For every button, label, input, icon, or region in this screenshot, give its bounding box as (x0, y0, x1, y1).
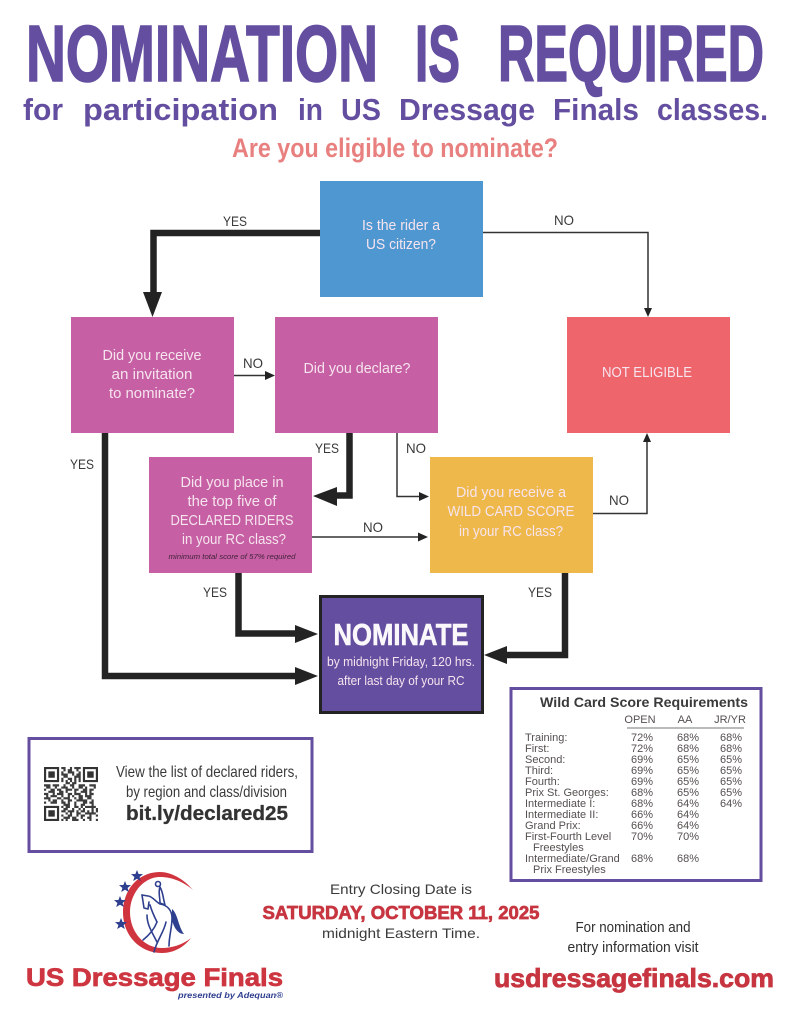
entry closing date: Entry Closing Date is (330, 881, 472, 897)
link text: bit.ly/declared25 (126, 803, 288, 825)
link text (116, 764, 298, 825)
table rows: First-Fourth Level (525, 831, 611, 843)
box: US citizen: Is the rider a (362, 218, 441, 234)
arrow: declare no (397, 433, 429, 501)
table rows: Second: (525, 754, 565, 766)
arrow labels: NO (363, 519, 383, 535)
arrow: citizen no (483, 232, 652, 317)
logo crescent (123, 872, 193, 953)
table rows: 65% (720, 787, 742, 799)
subtitle (23, 92, 768, 127)
table heading: Wild Card Score Requirements (540, 694, 748, 710)
table column heads (624, 714, 746, 726)
box: wild card: in your RC class? (459, 524, 563, 540)
arrow: citizen yes (143, 233, 320, 317)
table rows: Third: (525, 765, 553, 777)
table rows: 66% (631, 820, 653, 832)
arrow: invitation yes (105, 433, 318, 685)
arrow labels: YES (70, 456, 94, 472)
table rows: 65% (677, 787, 699, 799)
box: top five: in your RC class? (182, 532, 286, 548)
table rows: 70% (631, 831, 653, 843)
arrow labels: YES (315, 440, 339, 456)
table rows: Training: (525, 732, 567, 744)
box: not eligible: NOT ELIGIBLE (602, 365, 692, 381)
table rows: 72% (631, 732, 653, 744)
box: invitation (71, 317, 234, 433)
table rows: 65% (720, 776, 742, 788)
box: top five: Did you place in (180, 475, 284, 491)
box: invitation: to nominate? (109, 386, 195, 402)
title (26, 9, 764, 98)
arrow labels: NO (243, 355, 263, 371)
box: declare (275, 317, 438, 433)
table rows: 64% (720, 798, 742, 810)
arrow labels: YES (223, 213, 247, 229)
table rows: 69% (631, 765, 653, 777)
box: top five (149, 457, 312, 573)
box: nominate (320, 596, 482, 712)
table rows: Freestyles (533, 842, 584, 854)
table rows: 68% (677, 743, 699, 755)
table rows: 70% (677, 831, 699, 843)
box: nominate: by midnight Friday, 120 hrs. (327, 655, 475, 669)
table rows: 65% (677, 776, 699, 788)
table rows: Prix St. Georges: (525, 787, 609, 799)
table rows: 68% (677, 732, 699, 744)
arrow: wild card yes (484, 573, 565, 664)
table column heads: JR/YR (714, 714, 746, 726)
website information: entry information visit (568, 939, 699, 956)
table rows: Intermediate I: (525, 798, 595, 810)
table rows: Intermediate/Grand (525, 853, 620, 865)
subtitle: in (298, 92, 323, 127)
subtitle: US (341, 92, 381, 127)
table rows: 72% (631, 743, 653, 755)
table rows: 64% (677, 809, 699, 821)
table rows: Grand Prix: (525, 820, 581, 832)
table rows: 69% (631, 776, 653, 788)
box: wild card: Did you receive a (456, 485, 567, 501)
arrow labels (70, 212, 629, 600)
box: invitation: Did you receive (102, 348, 202, 364)
arrow labels: NO (554, 212, 574, 228)
subtitle: Dressage (399, 92, 535, 127)
table rows: Fourth: (525, 776, 560, 788)
table rows: 65% (677, 765, 699, 777)
arrow: wild card no (593, 433, 651, 514)
table rows: Intermediate II: (525, 809, 598, 821)
box: US citizen (320, 181, 483, 297)
link text: View the list of declared riders, (116, 764, 298, 781)
logo sponsor line: presented by Adequan® (177, 990, 284, 1000)
table rows: 69% (631, 754, 653, 766)
subtitle: for (23, 92, 63, 127)
logo stars (114, 870, 143, 929)
arrow labels: YES (528, 584, 552, 600)
logo: US Dressage Finals (26, 870, 284, 1000)
subtitle: classes. (657, 92, 768, 127)
table rows: 68% (631, 787, 653, 799)
table rows: 64% (677, 798, 699, 810)
table rows: 65% (677, 754, 699, 766)
box: invitation: an invitation (112, 367, 192, 383)
arrow: top five yes (238, 573, 318, 643)
title: IS (415, 9, 460, 98)
website information (494, 919, 774, 993)
box: wild card: WILD CARD SCORE (448, 504, 575, 520)
entry closing date: midnight Eastern Time. (322, 925, 480, 941)
table rows: 64% (677, 820, 699, 832)
box: top five: DECLARED RIDERS (170, 513, 294, 529)
eligibility question: Are you eligible to nominate? (232, 133, 558, 163)
table rows: First: (525, 743, 549, 755)
box: top five: minimum total score of 57% required (168, 554, 297, 561)
box: nominate: NOMINATE (334, 617, 468, 652)
box: declare: Did you declare? (304, 361, 410, 377)
arrow: invitation no (234, 371, 275, 380)
website information: usdressagefinals.com (494, 963, 774, 993)
box: wild card (430, 457, 593, 573)
box: top five: the top five of (188, 494, 277, 510)
table rows (525, 732, 742, 876)
table rows: 68% (631, 853, 653, 865)
entry closing date: SATURDAY, OCTOBER 11, 2025 (262, 903, 540, 923)
title: NOMINATION (26, 9, 378, 98)
table rows: Prix Freestyles (533, 864, 606, 876)
arrow: top five no (312, 532, 428, 542)
table column heads: AA (678, 714, 693, 726)
subtitle: Finals (553, 92, 639, 127)
website information: For nomination and (576, 919, 690, 936)
entry closing date (262, 881, 540, 941)
arrow labels: NO (406, 440, 426, 456)
arrow labels: NO (609, 492, 629, 508)
table rows: 68% (631, 798, 653, 810)
subtitle: participation (83, 92, 278, 127)
flowchart (70, 181, 730, 712)
box: nominate: after last day of your RC (338, 674, 464, 688)
table column heads: OPEN (624, 714, 656, 726)
table rows: 68% (677, 853, 699, 865)
table rows: 68% (720, 732, 742, 744)
box: US citizen: US citizen? (366, 237, 436, 253)
logo horse and rider (142, 882, 172, 952)
icon: QR code (44, 767, 98, 821)
table rows: 68% (720, 743, 742, 755)
panel: declared riders link (29, 738, 312, 852)
link text: by region and class/division (126, 784, 287, 801)
arrow labels: YES (203, 584, 227, 600)
arrow: declare yes (313, 433, 350, 506)
table rows: 65% (720, 765, 742, 777)
logo wordmark: US Dressage Finals (26, 964, 283, 992)
panel: wild card score requirements (511, 688, 761, 880)
table rows: 66% (631, 809, 653, 821)
box: not eligible (567, 317, 730, 433)
table rows: 65% (720, 754, 742, 766)
